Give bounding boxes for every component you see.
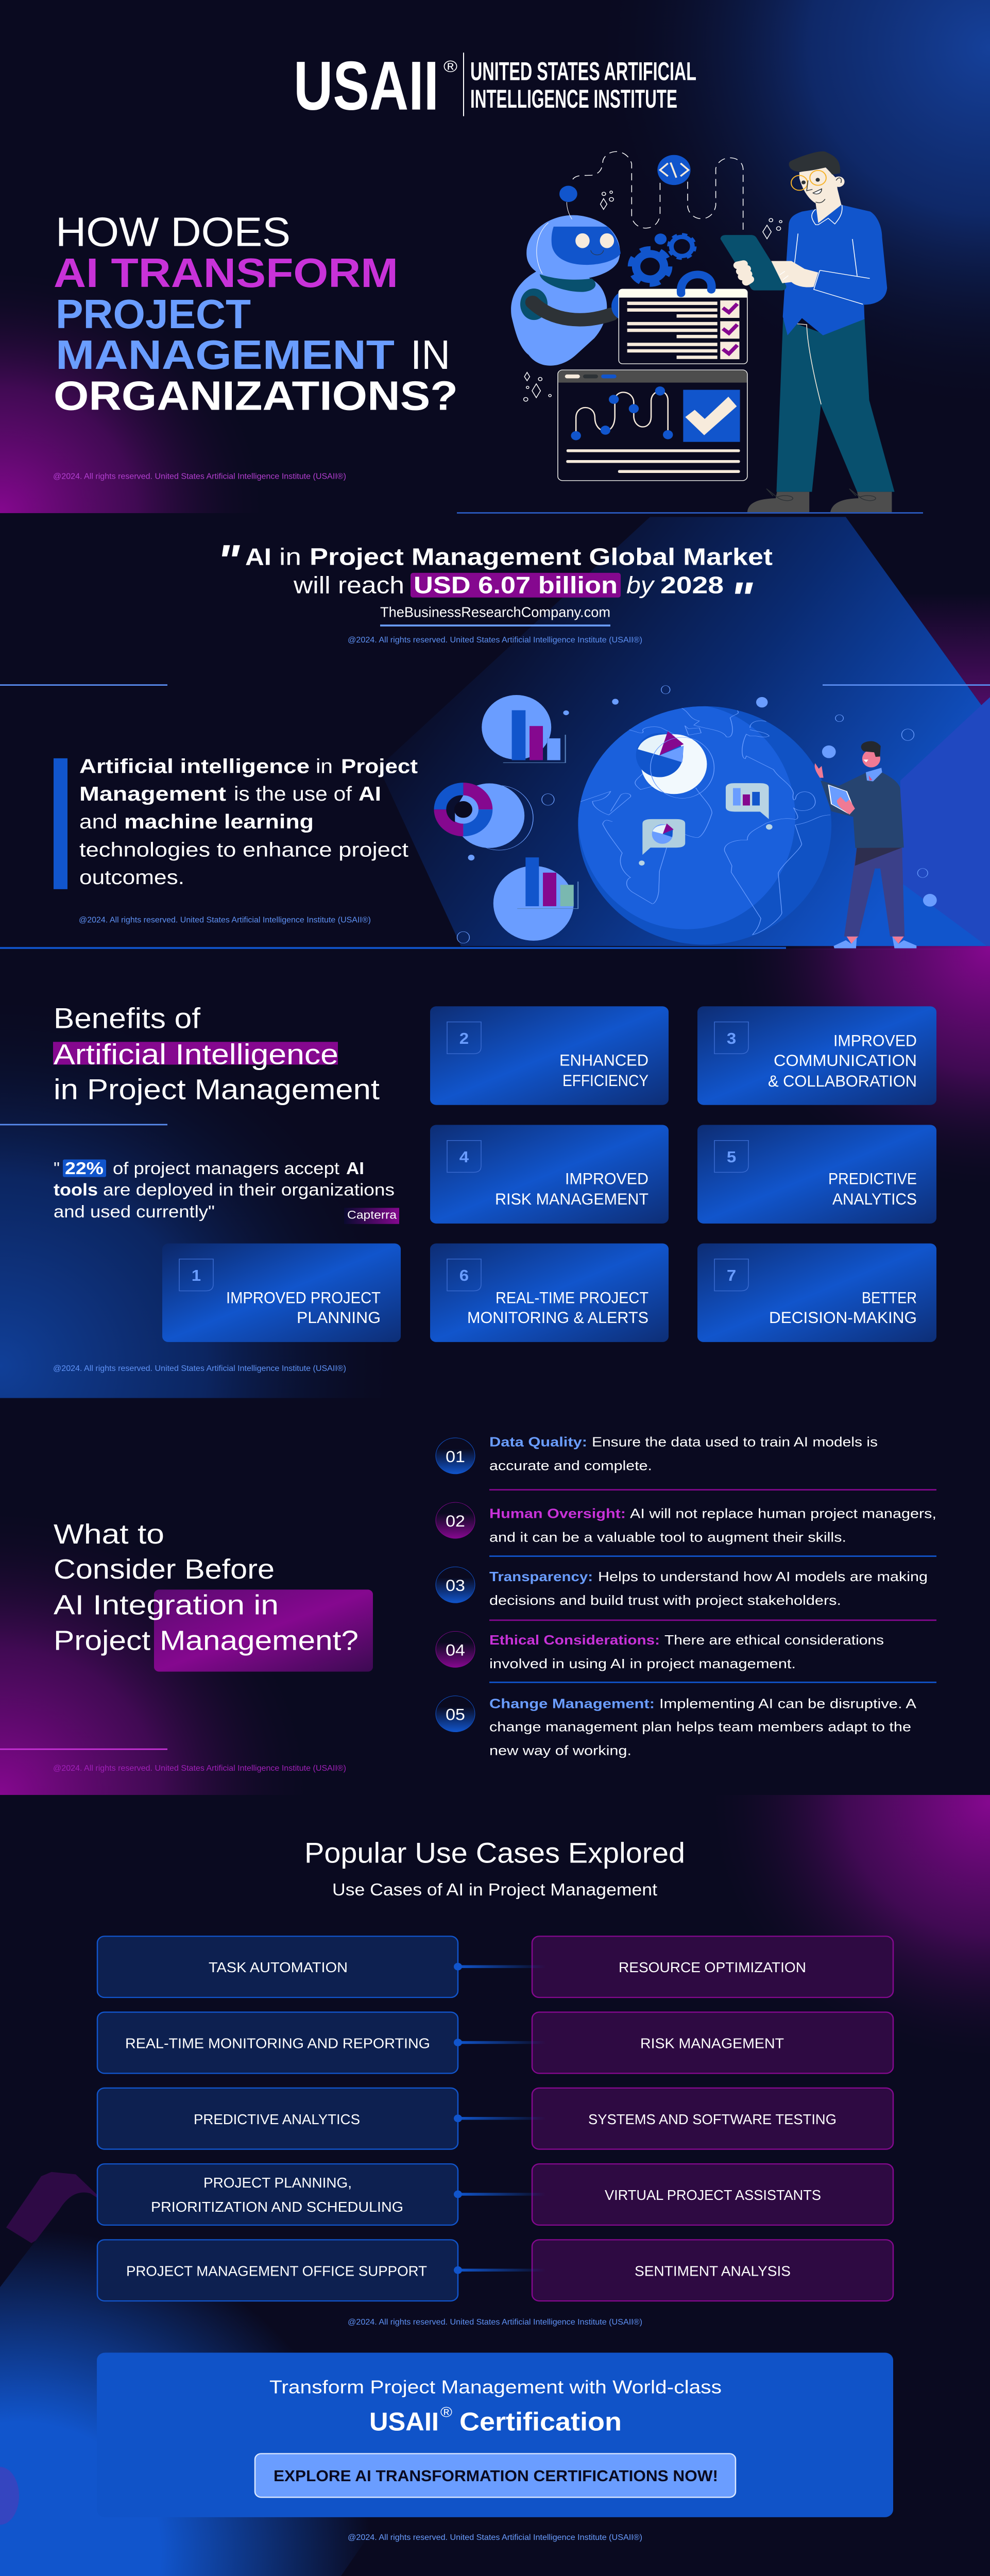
logo: USAII: ® bbox=[443, 57, 457, 76]
benefit card 3 bbox=[697, 1006, 936, 1105]
callout: 22% statistic: 22% bbox=[65, 1159, 104, 1178]
callout: market quote: 2028 bbox=[660, 572, 724, 599]
callout: market quote: by bbox=[626, 572, 655, 599]
consideration 05: 05 bbox=[446, 1705, 465, 1723]
use case row 4: VIRTUAL PROJECT ASSISTANTS bbox=[605, 2188, 821, 2204]
title: MANAGEMENT bbox=[56, 331, 395, 378]
consideration 02 bbox=[436, 1502, 936, 1545]
logo: USAII: UNITED STATES ARTIFICIAL bbox=[470, 57, 696, 86]
callout: market quote: USD 6.07 billion bbox=[414, 572, 618, 599]
heading: what to consider: AI Integration in bbox=[54, 1589, 279, 1620]
benefit card 7: 7 bbox=[727, 1266, 736, 1284]
consideration 03 bbox=[436, 1567, 928, 1608]
icon: code badge bbox=[657, 155, 691, 185]
callout: market quote bbox=[217, 536, 773, 626]
title: HOW DOES bbox=[56, 209, 291, 255]
benefit card 5 bbox=[697, 1125, 936, 1224]
heading: what to consider: What to bbox=[54, 1519, 164, 1550]
icon: project manager figure bbox=[721, 151, 895, 512]
consideration 04: involved in using AI in project management. bbox=[489, 1656, 796, 1671]
title: PROJECT bbox=[56, 291, 251, 337]
text block: definition: in bbox=[316, 755, 333, 777]
benefit card 1: 1 bbox=[192, 1266, 201, 1284]
title bbox=[54, 209, 458, 419]
consideration 05: new way of working. bbox=[489, 1743, 631, 1758]
benefit card 1 bbox=[162, 1243, 401, 1342]
callout: 22% statistic: and used currently" bbox=[54, 1202, 215, 1222]
logo: USAII: USAII bbox=[294, 47, 439, 124]
heading: what to consider: Project bbox=[54, 1625, 151, 1656]
callout: 22% statistic: of project managers accept bbox=[113, 1159, 339, 1178]
consideration 02: and it can be a valuable tool to augment their skills. bbox=[489, 1530, 846, 1545]
benefit card 7 bbox=[697, 1243, 936, 1342]
heading: popular use cases: Use Cases of AI in Project Management bbox=[332, 1880, 657, 1900]
icon: presenter figure bbox=[815, 741, 916, 948]
benefit card 2: EFFICIENCY bbox=[562, 1071, 648, 1090]
bar chart: bottom left bbox=[493, 857, 578, 941]
consideration 01: accurate and complete. bbox=[489, 1458, 652, 1473]
panel: checklist bbox=[619, 289, 747, 364]
copyright: consider: @2024. All rights reserved. United States Artificial Intelligence Institute (USAII®) bbox=[53, 1764, 346, 1773]
text block: definition: machine learning bbox=[124, 810, 314, 833]
icon: dashed workflow path bbox=[573, 151, 743, 234]
text block: definition: Project bbox=[341, 755, 418, 777]
use case row 1: RESOURCE OPTIMIZATION bbox=[619, 1960, 806, 1976]
icon: floating bubbles bbox=[457, 686, 937, 943]
heading: benefits: Artificial Intelligence bbox=[54, 1039, 338, 1071]
heading: what to consider: Consider Before bbox=[54, 1554, 275, 1585]
panel: certification call to action bbox=[97, 2352, 893, 2517]
use case row 1: TASK AUTOMATION bbox=[209, 1960, 348, 1976]
use case row 4 bbox=[97, 2164, 893, 2225]
benefit card 2: 2 bbox=[459, 1029, 469, 1047]
text block: definition: Artificial intelligence bbox=[79, 755, 310, 777]
consideration 04 bbox=[436, 1631, 884, 1671]
benefit card 4 bbox=[430, 1125, 669, 1224]
callout: market quote: in bbox=[279, 544, 301, 570]
use case row 3: SYSTEMS AND SOFTWARE TESTING bbox=[588, 2112, 837, 2127]
panel: certification call to action: USAII bbox=[369, 2407, 439, 2436]
benefit card 6: REAL-TIME PROJECT bbox=[496, 1289, 648, 1307]
heading: benefits bbox=[53, 1003, 380, 1106]
copyright: definition: @2024. All rights reserved. United States Artificial Intelligence Institute (USAII®) bbox=[79, 916, 371, 924]
consideration 03: Transparency: bbox=[489, 1569, 593, 1584]
button: EXPLORE AI TRANSFORMATION CERTIFICATIONS NOW! bbox=[274, 2467, 718, 2485]
consideration 02: AI will not replace human project managers, bbox=[630, 1506, 936, 1521]
benefit card 7: DECISION-MAKING bbox=[769, 1308, 917, 1327]
decorative rule under globe bbox=[0, 947, 786, 949]
consideration 01: 01 bbox=[446, 1447, 465, 1466]
use case row 2: REAL-TIME MONITORING AND REPORTING bbox=[125, 2036, 430, 2052]
illustration: robot and project manager bbox=[511, 151, 894, 512]
callout: market quote: TheBusinessResearchCompany.com bbox=[380, 605, 610, 620]
logo: USAII: INTELLIGENCE INSTITUTE bbox=[470, 84, 677, 113]
chart bubble: pie bbox=[639, 819, 773, 866]
use case row 3 bbox=[97, 2088, 893, 2149]
icon: gears bbox=[630, 233, 695, 284]
text block: definition bbox=[54, 755, 418, 889]
use case row 1 bbox=[97, 1936, 893, 1997]
consideration 02: Human Oversight: bbox=[489, 1506, 626, 1521]
use case row 4: PROJECT PLANNING, bbox=[203, 2175, 352, 2191]
use case row 2: RISK MANAGEMENT bbox=[640, 2036, 784, 2052]
text block: definition: AI bbox=[359, 782, 381, 805]
callout: 22% statistic: AI bbox=[346, 1159, 364, 1178]
copyright: benefits: @2024. All rights reserved. United States Artificial Intelligence Institute (USAII®) bbox=[53, 1364, 346, 1373]
heading: benefits: in Project Management bbox=[54, 1074, 380, 1106]
text block: definition: outcomes. bbox=[79, 866, 184, 888]
panel: dashboard bbox=[558, 370, 747, 481]
benefit card 6 bbox=[430, 1243, 669, 1342]
heading: popular use cases: Popular Use Cases Explored bbox=[304, 1838, 685, 1869]
callout: 22% statistic: tools bbox=[54, 1181, 98, 1199]
title: ORGANIZATIONS? bbox=[54, 372, 458, 419]
benefit card 3: COMMUNICATION bbox=[774, 1051, 917, 1070]
benefit card 4: IMPROVED bbox=[565, 1170, 648, 1188]
consideration 04: Ethical Considerations: bbox=[489, 1633, 660, 1648]
copyright: use cases: @2024. All rights reserved. United States Artificial Intelligence Institute (USAII®) bbox=[348, 2318, 642, 2327]
title: AI TRANSFORM bbox=[54, 249, 398, 296]
chart bubble: bars bbox=[726, 783, 769, 819]
heading: benefits: Benefits of bbox=[54, 1003, 201, 1035]
title: IN bbox=[411, 331, 450, 378]
consideration 05 bbox=[436, 1696, 916, 1758]
icon: arch clip bbox=[681, 275, 711, 293]
callout: 22% statistic: are deployed in their organizations bbox=[103, 1181, 395, 1199]
panel: certification call to action: ® bbox=[440, 2405, 452, 2420]
consideration 03: Helps to understand how AI models are making bbox=[598, 1569, 928, 1584]
consideration 05: Change Management: bbox=[489, 1697, 655, 1711]
benefit card 5: 5 bbox=[727, 1148, 736, 1166]
use case row 5 bbox=[97, 2240, 893, 2301]
logo: USAII bbox=[294, 47, 696, 124]
heading: what to consider bbox=[54, 1519, 373, 1672]
callout: market quote: " bbox=[730, 573, 754, 623]
panel: certification call to action: Transform Project Management with World-class bbox=[269, 2377, 722, 2397]
benefit card 2 bbox=[430, 1006, 669, 1105]
consideration 03: 03 bbox=[446, 1576, 465, 1595]
bar chart: top left bbox=[482, 695, 566, 762]
consideration 01: Ensure the data used to train AI models is bbox=[592, 1434, 878, 1449]
consideration 03: decisions and build trust with project stakeholders. bbox=[489, 1593, 841, 1608]
benefit card 7: BETTER bbox=[862, 1289, 917, 1307]
icon: sparkles bbox=[524, 191, 782, 401]
benefit card 6: 6 bbox=[459, 1266, 469, 1284]
icon: robot bbox=[511, 186, 634, 366]
benefit card 2: ENHANCED bbox=[559, 1051, 648, 1069]
callout: 22% statistic: Capterra bbox=[347, 1208, 397, 1221]
consideration 05: change management plan helps team members adapt to the bbox=[489, 1720, 911, 1734]
consideration 05: Implementing AI can be disruptive. A bbox=[659, 1697, 916, 1711]
button bbox=[255, 2454, 736, 2497]
copyright: hero: @2024. All rights reserved. United States Artificial Intelligence Institute (USAII®) bbox=[53, 472, 346, 481]
decorative rule under hero bbox=[457, 512, 923, 514]
text block: definition: is the use of bbox=[234, 782, 352, 805]
heading: popular use cases bbox=[304, 1838, 685, 1900]
benefit card 1: IMPROVED PROJECT bbox=[226, 1289, 381, 1307]
consideration 02: 02 bbox=[446, 1512, 465, 1530]
illustration: globe with data charts and presenter bbox=[434, 685, 937, 948]
benefit card 3: 3 bbox=[727, 1029, 736, 1047]
copyright: quote: @2024. All rights reserved. United States Artificial Intelligence Institute (USAII®) bbox=[348, 636, 642, 645]
text block: definition: Management bbox=[79, 782, 226, 805]
pie chart: on globe bbox=[636, 731, 714, 798]
benefit card 3: IMPROVED bbox=[833, 1031, 917, 1049]
callout: market quote: AI bbox=[245, 544, 271, 570]
heading: what to consider: Management? bbox=[160, 1625, 359, 1656]
use case row 5: PROJECT MANAGEMENT OFFICE SUPPORT bbox=[126, 2263, 427, 2279]
use case row 5: SENTIMENT ANALYSIS bbox=[635, 2263, 791, 2279]
benefit card 5: ANALYTICS bbox=[832, 1190, 917, 1208]
text block: definition: technologies to enhance project bbox=[79, 838, 408, 861]
benefit card 5: PREDICTIVE bbox=[828, 1170, 917, 1188]
use case row 2 bbox=[97, 2012, 893, 2073]
consideration 04: 04 bbox=[446, 1641, 465, 1659]
use case row 4: PRIORITIZATION AND SCHEDULING bbox=[151, 2199, 403, 2215]
use case row 3: PREDICTIVE ANALYTICS bbox=[194, 2112, 360, 2127]
callout: market quote: " bbox=[217, 536, 241, 586]
callout: 22% statistic: " bbox=[54, 1159, 60, 1178]
consideration 01 bbox=[436, 1434, 878, 1474]
callout: market quote: Project Management Global Market bbox=[310, 544, 773, 570]
donut chart bbox=[434, 783, 533, 850]
consideration 04: There are ethical considerations bbox=[664, 1633, 884, 1648]
benefit card 6: MONITORING & ALERTS bbox=[467, 1308, 648, 1327]
text block: definition: and bbox=[79, 810, 117, 833]
callout: market quote: will reach bbox=[293, 572, 404, 599]
benefit card 1: PLANNING bbox=[297, 1308, 381, 1327]
consideration 01: Data Quality: bbox=[489, 1434, 587, 1449]
benefit card 4: RISK MANAGEMENT bbox=[495, 1190, 648, 1208]
callout: 22% statistic bbox=[54, 1159, 399, 1224]
copyright: footer: @2024. All rights reserved. United States Artificial Intelligence Institute (USAII®) bbox=[348, 2533, 642, 2542]
benefit card 4: 4 bbox=[459, 1148, 469, 1166]
benefit card 3: & COLLABORATION bbox=[768, 1072, 917, 1090]
panel: certification call to action: Certification bbox=[459, 2407, 622, 2436]
icon: globe bbox=[578, 704, 831, 945]
